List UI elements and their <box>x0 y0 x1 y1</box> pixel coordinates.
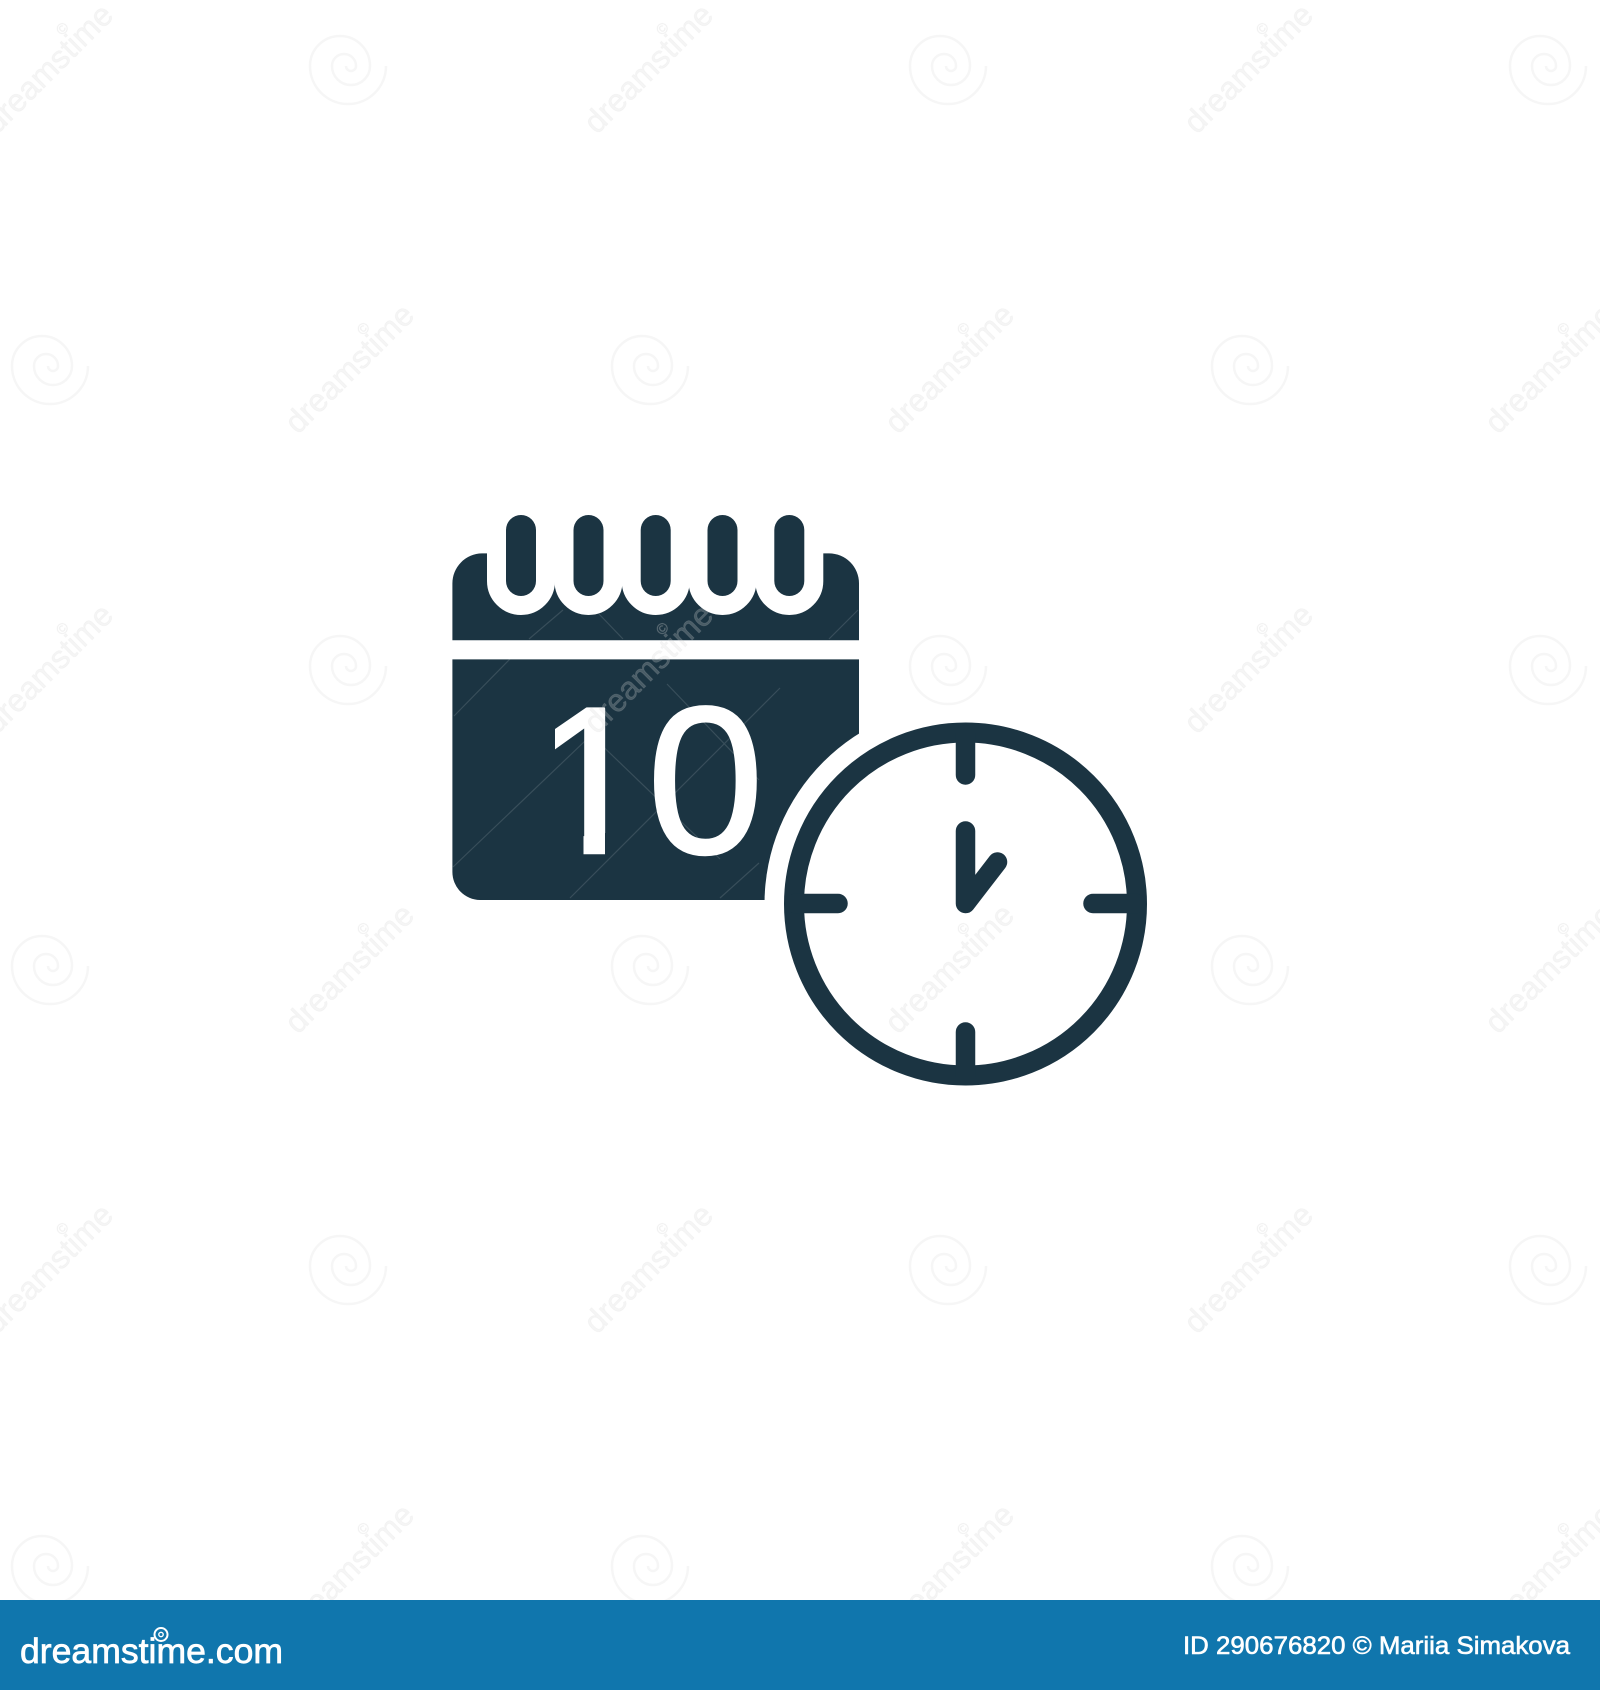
icon: calendar with clock <box>452 515 1166 1105</box>
watermark text: dreamstime <box>877 296 1021 440</box>
clock face <box>794 732 1137 1076</box>
clock hands <box>966 831 998 904</box>
calendar watermark hairlines <box>453 610 858 898</box>
footer logo: dreamstime.com <box>20 1632 283 1671</box>
watermark text: dreamstime <box>576 0 720 140</box>
calendar date number: 1 <box>533 663 649 898</box>
calendar body <box>452 659 859 900</box>
watermark text: dreamstime <box>877 896 1021 1040</box>
watermark text: © <box>1253 619 1273 639</box>
watermark text: © <box>954 1519 974 1539</box>
watermark text: © <box>954 919 974 939</box>
watermark text: © <box>354 919 374 939</box>
watermark text: © <box>53 1219 73 1239</box>
watermark text: dreamstime <box>877 1496 1021 1640</box>
calendar date number: 0 <box>647 663 764 898</box>
watermark text: © <box>1554 1519 1574 1539</box>
watermark text: © <box>1253 1219 1273 1239</box>
watermark text: dreamstime <box>277 1496 421 1640</box>
watermark text: © <box>653 19 673 39</box>
footer bar <box>0 1600 1600 1690</box>
watermark text: dreamstime <box>576 1196 720 1340</box>
watermark text: © <box>1253 19 1273 39</box>
calendar header block <box>452 553 859 640</box>
watermark text: dreamstime <box>1176 596 1320 740</box>
watermark text: dreamstime <box>1176 1196 1320 1340</box>
calendar binding rings <box>506 515 804 596</box>
watermark text: © <box>653 619 673 639</box>
footer credit: ID 290676820 © Mariia Simakova <box>1183 1632 1570 1660</box>
watermark text: © <box>1554 319 1574 339</box>
watermark text: dreamstime <box>277 296 421 440</box>
watermark text: © <box>1554 919 1574 939</box>
watermark text: © <box>653 1219 673 1239</box>
clock cutout <box>764 703 1166 1105</box>
watermark text: dreamstime <box>1176 0 1320 140</box>
watermark text: © <box>53 19 73 39</box>
watermark text: dreamstime <box>576 596 720 740</box>
watermark text: © <box>354 319 374 339</box>
watermark text: dreamstime <box>277 896 421 1040</box>
watermark text: © <box>954 319 974 339</box>
calendar date number <box>555 705 757 856</box>
watermark text: © <box>354 1519 374 1539</box>
watermark text: © <box>53 619 73 639</box>
